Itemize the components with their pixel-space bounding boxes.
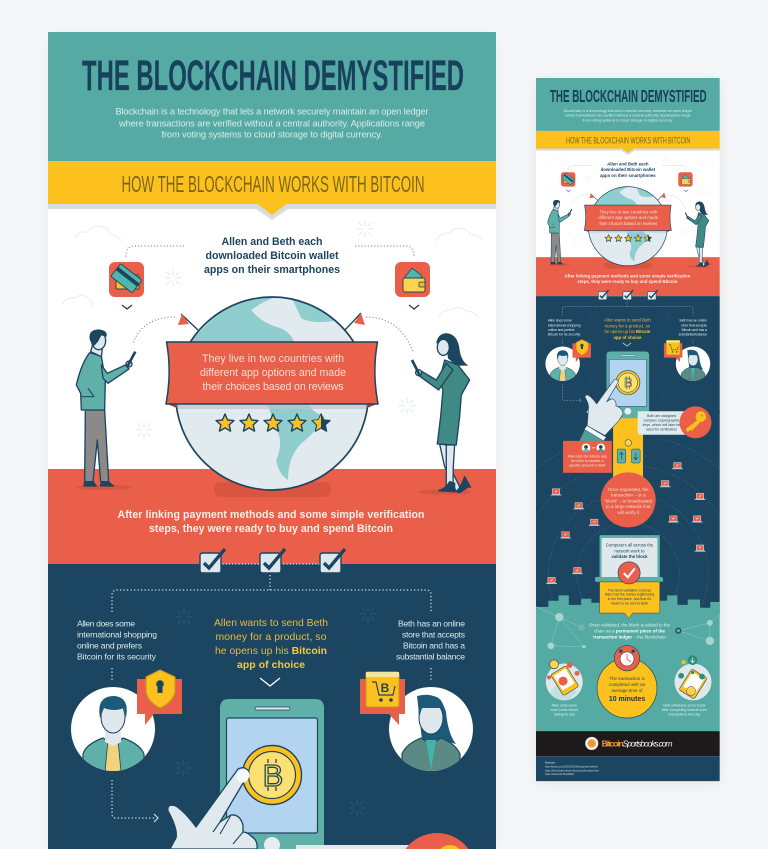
mini intro text: where transactions are verified without a central authority. Applications range: [565, 114, 691, 118]
mini bitcoin symbol: B: [624, 375, 632, 390]
mini intro text: Blockchain is a technology that lets a network securely maintain an open ledger: [564, 109, 693, 113]
Allen description: Bitcoin for its security: [77, 652, 157, 662]
average time text: average time of: [612, 688, 643, 693]
mini ribbon text: different app options and made: [598, 215, 659, 220]
navy lower background: [536, 410, 720, 615]
mini wallet apps text: apps on their smartphones: [600, 173, 656, 178]
sources text: https://blockchain.info/en/strong-confirmation-time: [545, 769, 600, 772]
validation callout text: The block validation ensures: [608, 588, 652, 592]
Beth description: substantial balance: [396, 652, 465, 662]
right spot illustration: [675, 655, 711, 700]
sources text: http://bitcoin.com/2015/02/10/blockchain-defined: [545, 766, 598, 769]
broadcast text: to a large network that: [606, 504, 651, 509]
sources text: https://www.bwf.it/bp3Wq0: [545, 773, 574, 776]
icon: wallet: [395, 262, 430, 297]
footer logo bar: [536, 731, 720, 756]
pointing hand, full: [585, 380, 623, 436]
validate text: Computers all across the: [606, 543, 654, 548]
dotted tree connector: [112, 575, 431, 818]
icon: credit card: [109, 262, 144, 297]
figure: Allen: [76, 329, 135, 490]
Beth description: Bitcoin and has a: [403, 640, 465, 650]
mini Allen description: online and prefers: [548, 328, 575, 332]
chevron to phone: [260, 678, 280, 686]
sleeve: [578, 429, 607, 443]
cuff: [584, 426, 606, 441]
badge: security shield: [137, 670, 182, 725]
validation monitor: [595, 535, 663, 582]
left spot illustration: [546, 660, 583, 705]
mini Beth description: Beth has an online: [679, 319, 707, 323]
send money text: money for a product, so: [216, 632, 327, 643]
key panel top: [296, 833, 468, 849]
wallet apps text: downloaded Bitcoin wallet: [206, 250, 339, 262]
mini intro text: from voting systems to cloud storage to digital currency.: [583, 118, 673, 122]
panel: main infographic: [48, 32, 496, 849]
send money text: app of choice: [237, 660, 305, 671]
broadcast text: transaction – or a: [611, 493, 646, 498]
heading band: [48, 161, 496, 220]
pointing hand: [168, 767, 257, 849]
wallet apps text: Allen and Beth each: [222, 236, 322, 248]
ribbon text: They live in two countries with: [202, 353, 344, 365]
transfer phones: [617, 440, 640, 463]
send money text: Allen wants to send Beth: [214, 618, 328, 629]
average time text: completed with an: [609, 682, 646, 687]
flags: [178, 313, 365, 330]
verification text: steps, they were ready to buy and spend Bitcoin: [149, 523, 393, 535]
key text: used for verification: [646, 428, 677, 432]
store cart symbol: B: [381, 681, 390, 695]
ribbon banner: [166, 342, 378, 408]
portrait: Allen: [71, 687, 155, 772]
mini verification text: After linking payment methods and some simple verification: [564, 273, 691, 278]
broadcast circle: [601, 472, 656, 527]
section heading: HOW THE BLOCKCHAIN WORKS WITH BITCOIN: [122, 171, 424, 197]
average time text: The transaction is: [609, 676, 646, 681]
network monitors: [546, 463, 705, 584]
mini send money text: he opens up his Bitcoin: [604, 329, 650, 334]
message box text: Allen tells the Bitcoin app: [568, 455, 607, 459]
red ground: [48, 469, 496, 564]
validation callout text: in the first place, and that it's: [608, 597, 651, 601]
phone bottom: [607, 410, 649, 418]
message box text: specific amount to Beth: [569, 464, 606, 468]
globe: [168, 269, 378, 497]
Allen funds caption: more funds before: [550, 708, 578, 712]
intro text: from voting systems to cloud storage to digital currency.: [162, 130, 382, 140]
clouds and sparkles: [62, 221, 482, 438]
ribbon text: different app options and made: [200, 367, 346, 379]
Beth funds caption: Beth withdraws some funds: [663, 704, 706, 708]
Allen description: international shopping: [77, 630, 157, 640]
validate text: validate the block: [611, 554, 648, 559]
navy section background: [48, 564, 496, 849]
broadcast text: “block” – is broadcasted: [604, 498, 653, 503]
mini Allen description: Bitcoin for its security: [548, 332, 581, 336]
bitcoin symbol: B: [263, 758, 283, 793]
text layer: main panel: [77, 52, 465, 793]
verification text: After linking payment methods and some simple verification: [118, 509, 424, 521]
mini verification text: steps, they were ready to buy and spend Bitcoin: [577, 279, 678, 284]
network nodes on teal: [536, 607, 720, 649]
sparkles on navy: [175, 606, 376, 816]
panel: miniature full infographic: [536, 78, 720, 784]
mini ribbon text: their choices based on reviews: [599, 221, 657, 226]
intro text: Blockchain is a technology that lets a network securely maintain an open ledger: [116, 106, 428, 116]
ribbon text: their choices based on reviews: [202, 381, 344, 393]
chevrons under icons: [122, 305, 419, 309]
portrait: Beth: [389, 687, 473, 772]
mini send money text: app of choice: [613, 335, 642, 340]
Allen funds caption: Allen adds some: [552, 704, 577, 708]
Allen funds caption: calling for day: [554, 713, 575, 717]
checkboxes: [200, 549, 345, 573]
home button: [625, 408, 631, 415]
yellow connector column: [613, 416, 643, 480]
text layer: miniature: [545, 86, 707, 776]
teal lower background with pixel edge: [536, 595, 720, 731]
check badge: [618, 562, 640, 584]
ledger text: chain as a permanent piece of the: [594, 628, 665, 633]
key panel: [638, 406, 711, 438]
Allen description: Allen does some: [77, 618, 135, 628]
footer logo text: BitcoinSportsbooks.com: [602, 739, 673, 749]
key text: Both are assigned: [647, 414, 676, 418]
phone: [220, 699, 324, 849]
ledger text: Once validated, the block is added to the: [589, 623, 671, 628]
validation callout: [600, 582, 660, 618]
red message box: [563, 441, 612, 473]
illustration layer: main panel: [48, 32, 496, 849]
network arcs: [536, 438, 720, 608]
Beth description: Beth has an online: [398, 618, 465, 628]
arrow tip: [154, 814, 158, 822]
validation callout text: meant to be sent to Beth: [611, 601, 648, 605]
key text: complex cryptographic: [643, 419, 680, 423]
mini ribbon text: They live in two countries with: [599, 209, 658, 214]
ledger text: transaction ledger – the blockchain: [593, 634, 666, 639]
figure: Beth: [412, 333, 471, 495]
mini wallet apps text: downloaded Bitcoin wallet: [601, 167, 656, 172]
validation callout text: Allen had the money legitimately: [605, 592, 655, 596]
mini wallet apps text: Allen and Beth each: [607, 161, 649, 166]
validate text: network work to: [614, 548, 645, 553]
mini send money text: Allen wants to send Beth: [604, 318, 651, 323]
mini Beth description: store that accepts: [681, 323, 707, 327]
mini Allen description: international shopping: [548, 323, 581, 327]
sources bar: [536, 756, 720, 781]
broadcast text: will verify it: [617, 510, 640, 515]
mini Beth description: substantial balance: [679, 332, 707, 336]
broadcast text: Once requested, the: [608, 487, 649, 492]
send money text: he opens up his Bitcoin: [215, 646, 327, 657]
Beth funds caption: transactions that day: [669, 713, 701, 717]
average time text: 10 minutes: [609, 696, 645, 703]
header background: [48, 32, 496, 161]
mini Beth description: Bitcoin and has a: [682, 328, 707, 332]
star rating: [216, 414, 330, 431]
mini send money text: money for a product, so: [605, 323, 651, 328]
badge: online store: [360, 672, 405, 725]
message box text: he'd like to transfer a: [571, 459, 604, 463]
bitcoin coin: [242, 746, 302, 804]
clock and average time circle: [597, 645, 657, 718]
key text: keys, which will later be: [643, 423, 680, 427]
Allen description: online and prefers: [77, 640, 142, 650]
dotted connectors: [126, 246, 414, 352]
mini Allen description: Allen does some: [548, 319, 572, 323]
Beth funds caption: after completing several more: [662, 708, 707, 712]
intro text: where transactions are verified without a central authority. Applications range: [118, 118, 425, 128]
wallet apps text: apps on their smartphones: [204, 264, 340, 276]
title: THE BLOCKCHAIN DEMYSTIFIED: [82, 52, 464, 100]
sources text: Sources:: [545, 762, 556, 765]
Beth description: store that accepts: [402, 630, 465, 640]
